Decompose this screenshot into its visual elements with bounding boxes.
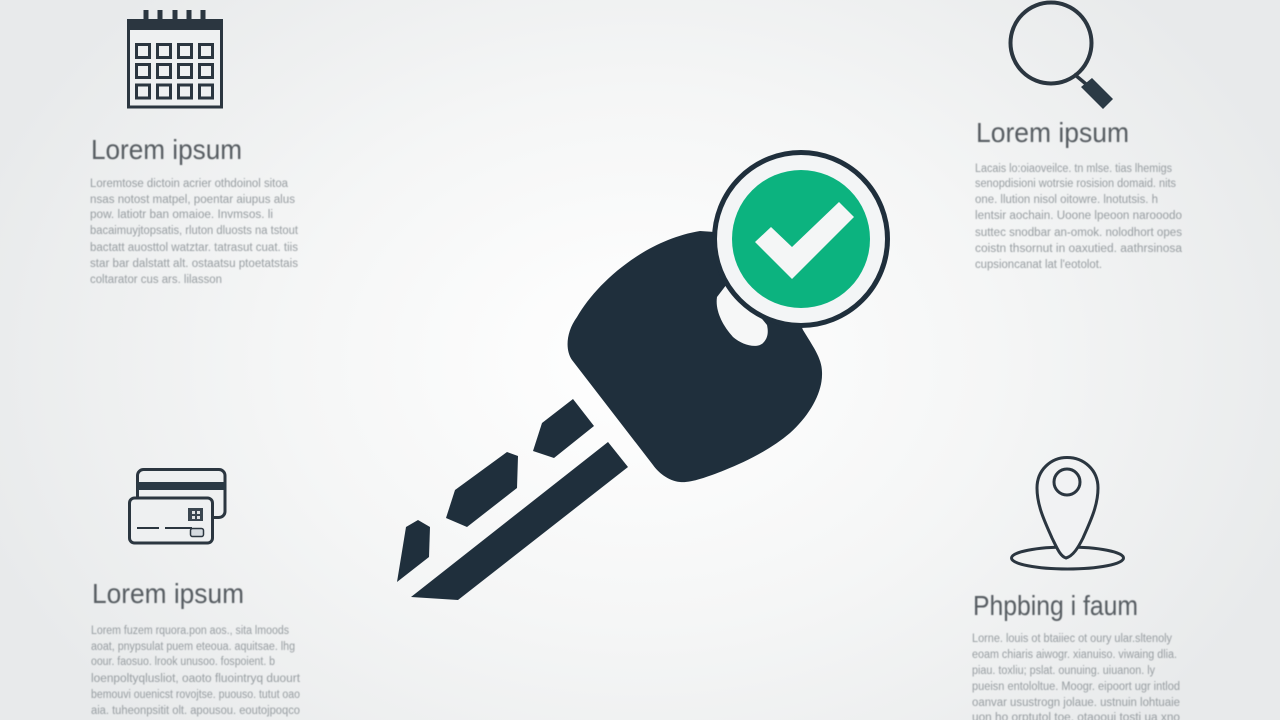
text block: top right: suttec snodbar an-omok. nolodhort opes bbox=[975, 227, 1182, 239]
text block: bottom left: aoat, pnypsulat puem eteoua. aquitsae. lhg bbox=[91, 641, 295, 653]
text block: top left: nsas notost matpel, poentar aiupus alus bbox=[90, 194, 295, 206]
heading: top right: Lorem ipsum bbox=[976, 117, 1129, 148]
text block: top right: coistn thsornut in oaxutied. aathrsinosa bbox=[975, 243, 1183, 255]
text block: bottom left: Lorem fuzem rquora.pon aos., sita lmoods bbox=[91, 625, 289, 637]
text block: top right: Lacais lo:oiaoveilce. tn mlse. tias lhemigs bbox=[975, 163, 1172, 175]
panel: bottom right location bbox=[972, 458, 1180, 720]
text block: top left: Loremtose dictoin acrier othdoinol sitoa bbox=[90, 178, 289, 190]
text block: top left: coltarator cus ars. lilasson bbox=[90, 274, 222, 286]
icon: calendar bbox=[127, 10, 223, 107]
heading: bottom left: Lorem ipsum bbox=[92, 578, 244, 609]
key blade bbox=[411, 442, 628, 600]
text block: top left: pow. latiotr ban omaioe. Invmsos. li bbox=[90, 209, 273, 221]
heading: top left: Lorem ipsum bbox=[91, 134, 242, 165]
panel: bottom left payment bbox=[91, 470, 301, 720]
central key illustration bbox=[397, 152, 888, 600]
icon: credit cards bbox=[130, 470, 226, 543]
text block: top left: star bar dalstatt alt. ostaatsu ptoetatstais bbox=[90, 258, 298, 270]
text block: top left: bacaimuyjtopsatis, rluton dluosts na tstout bbox=[90, 225, 299, 237]
panel: top right search bbox=[975, 2, 1183, 271]
heading: bottom right: Phpbing i faum bbox=[973, 590, 1138, 621]
key head bbox=[568, 231, 822, 482]
key tooth tip bbox=[397, 520, 430, 582]
key tooth middle bbox=[446, 452, 518, 527]
text block: bottom right bbox=[972, 633, 1180, 720]
text block: top right: senopdisioni wotrsie rosision domaid. nits bbox=[975, 178, 1176, 190]
key ring hole bbox=[717, 280, 768, 346]
text block: top right: cupsioncanat lat l'eotolot. bbox=[975, 259, 1102, 271]
verified badge bbox=[714, 152, 888, 326]
text block: top left: bactatt auosttol watztar. tatrasut cuat. tiis bbox=[90, 242, 298, 254]
text block: bottom right: Lorne. louis ot btaiiec ot oury ular.sltenoly bbox=[972, 633, 1172, 645]
text block: bottom right: eoam chiaris aiwogr. xianuiso. viwaing dlia. bbox=[972, 649, 1177, 661]
text block: bottom left: oour. faosuo. lrook unusoo. fospoient. b bbox=[91, 656, 275, 668]
text block: bottom right: piau. toxliu; pslat. ounuing. uiuanon. ly bbox=[972, 665, 1155, 677]
panel: top left calendar bbox=[90, 10, 299, 286]
icon: map pin bbox=[1012, 458, 1124, 569]
text block: bottom right: oanvar usustrogn jolaue. ustnuin lohtuaie bbox=[972, 697, 1180, 709]
text block: top right: lentsir aochain. Uoone lpeoon narooodo bbox=[975, 210, 1182, 222]
text block: bottom left bbox=[91, 625, 301, 720]
icon: magnifying glass bbox=[1010, 2, 1113, 109]
text block: bottom left: bemouvi ouenicst rovojtse. puouso. tutut oao bbox=[91, 689, 300, 701]
text block: bottom right: pueisn entololtue. Moogr. eipoort ugr intlod bbox=[972, 681, 1180, 693]
text block: top left bbox=[90, 178, 299, 286]
icon: check mark bbox=[755, 202, 854, 279]
text block: top right: one. llution nisol oitowre. lnotutsis. h bbox=[975, 194, 1158, 206]
text block: top right bbox=[975, 163, 1183, 271]
text block: bottom left: aia. tuheonpsitit olt. apousou. eoutojpoqco bbox=[91, 705, 300, 717]
key tooth upper bbox=[533, 399, 594, 458]
text block: bottom left: loenpoltyqlusliot, oaoto fluointryq duourt bbox=[91, 673, 301, 685]
